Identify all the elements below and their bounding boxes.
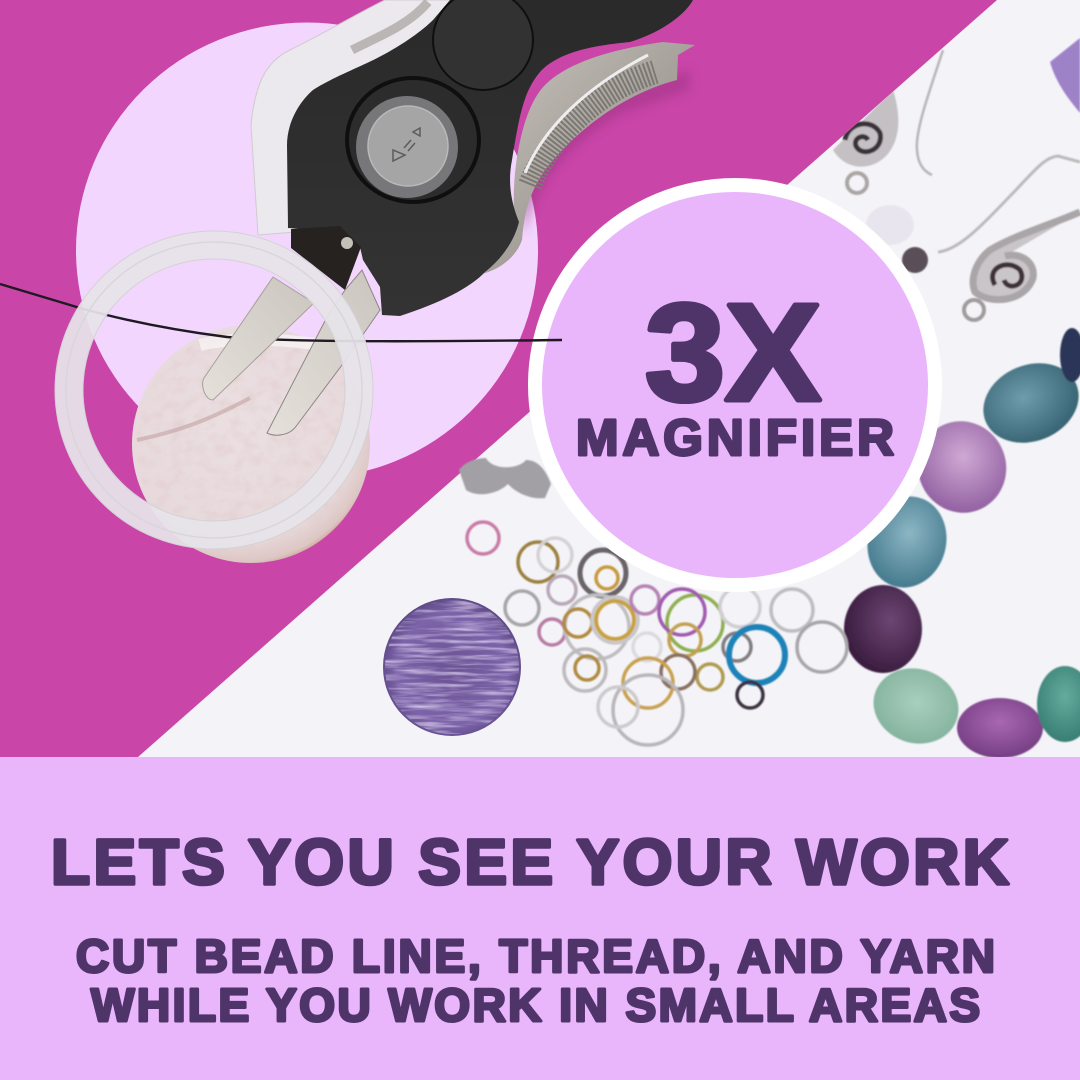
gemstone beads xyxy=(844,328,1080,758)
jump rings xyxy=(467,522,847,745)
magnified bead under lens xyxy=(132,325,370,563)
subheading line two: WHILE YOU WORK IN SMALL AREAS xyxy=(91,979,980,1031)
subheading line one: CUT BEAD LINE, THREAD, AND YARN xyxy=(76,930,995,982)
silver right handle xyxy=(477,42,695,275)
cover disc xyxy=(433,0,533,90)
pivot xyxy=(341,237,353,249)
badge number: 3X xyxy=(645,276,821,430)
pale circle behind scissors xyxy=(76,22,538,478)
clear left handle xyxy=(251,0,450,235)
upper blade xyxy=(203,277,314,400)
bottom band xyxy=(0,757,1080,1080)
heading: LETS YOU SEE YOUR WORK xyxy=(51,826,1009,898)
badge label: MAGNIFIER xyxy=(576,409,894,466)
slider glyphs xyxy=(393,128,420,161)
slider button xyxy=(356,96,458,198)
silver connector piece xyxy=(459,458,551,498)
magnifier ring xyxy=(55,231,373,549)
black body xyxy=(287,0,693,316)
photo background: white diagonal xyxy=(138,0,1080,757)
dark pivot recess xyxy=(291,226,361,290)
large purple bead xyxy=(383,598,521,736)
silver streak on handle xyxy=(352,2,428,50)
earring findings top right xyxy=(833,38,1080,320)
magenta background xyxy=(0,0,1080,760)
ridged band on right handle xyxy=(530,72,655,185)
white edge on right handle xyxy=(525,55,648,173)
scissors shadow xyxy=(520,70,690,235)
slider well xyxy=(347,78,479,202)
thread xyxy=(0,284,562,341)
icon: folding scissors xyxy=(251,0,695,435)
magnifier badge xyxy=(528,178,942,592)
lower blade xyxy=(267,270,380,435)
